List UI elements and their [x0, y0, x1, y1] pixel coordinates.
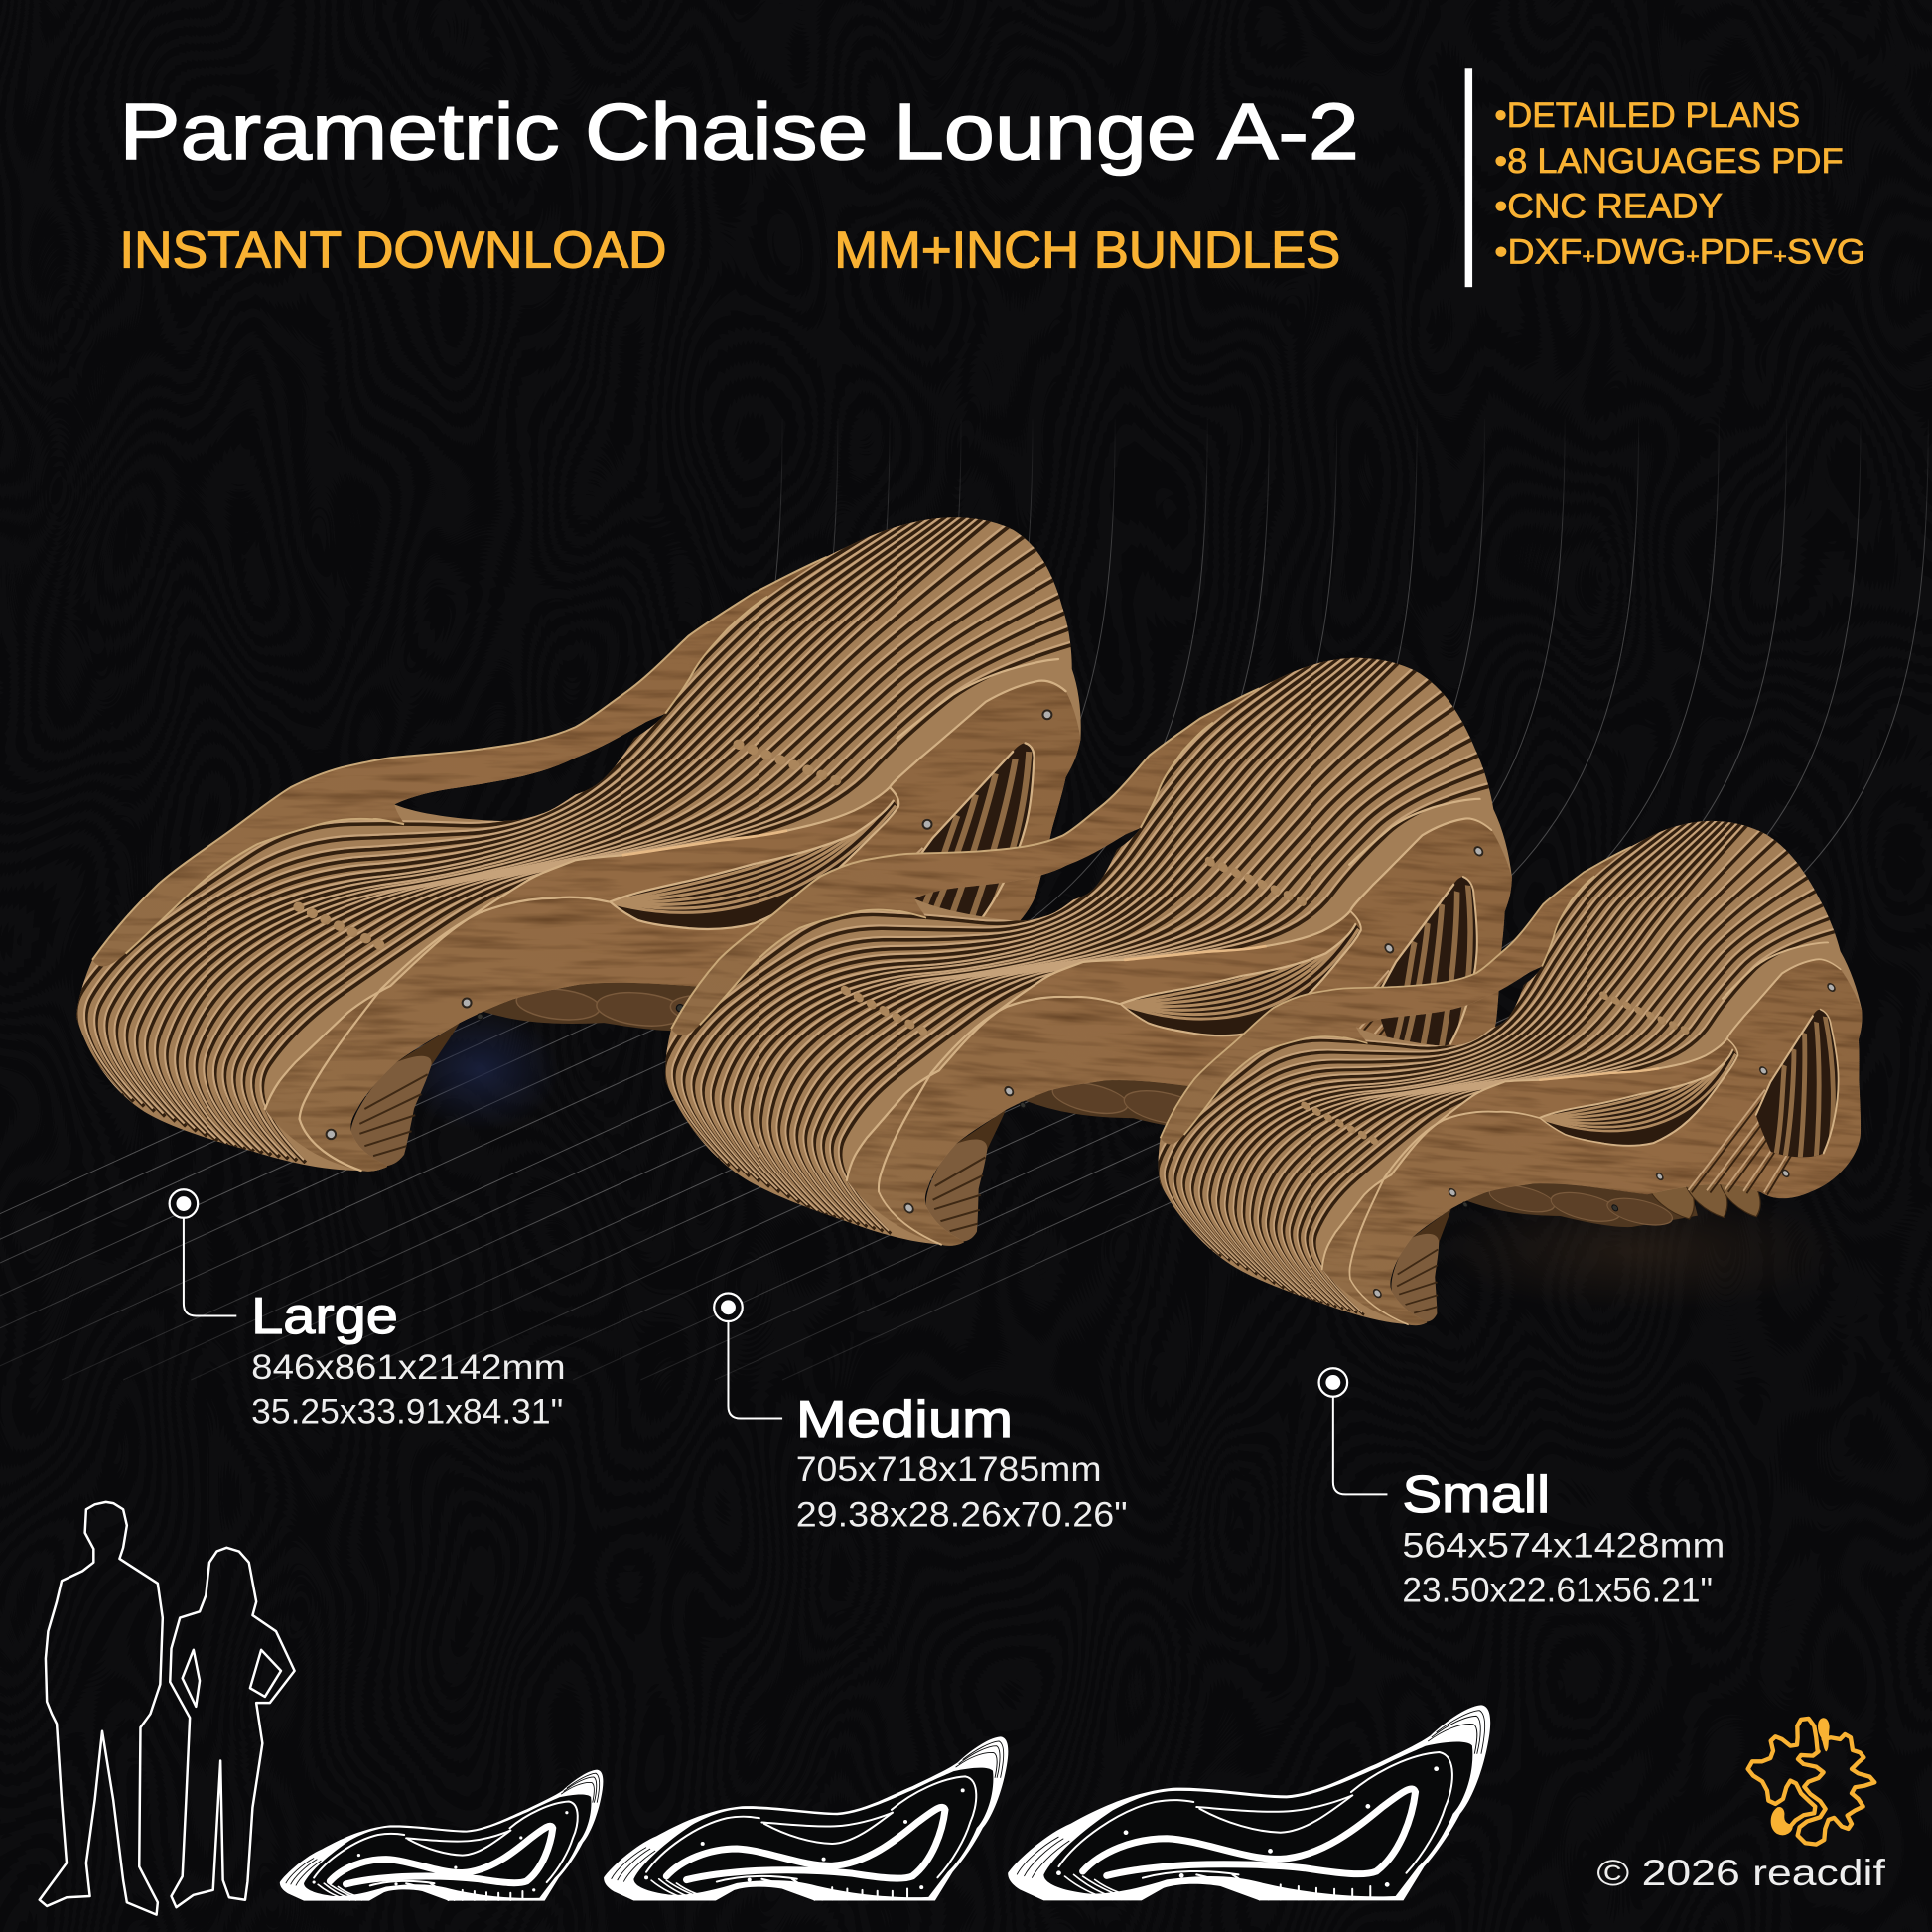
label: small size: [1319, 1368, 1725, 1609]
label: large size: 35.25x33.91x84.31": [251, 1393, 563, 1431]
floor reflection: [1430, 1189, 1849, 1312]
label: small size: 564x574x1428mm: [1402, 1528, 1725, 1566]
label: large size: [170, 1189, 566, 1431]
floor glow: [400, 1008, 561, 1131]
feature list: •DETAILED PLANS: [1494, 97, 1800, 135]
plan: medium profile: [604, 1736, 1008, 1901]
title: Parametric Chaise Lounge A-2: [119, 87, 1359, 176]
copyright: © 2026 reacdif: [1596, 1852, 1886, 1893]
chair: medium: [584, 581, 1595, 1289]
divider bar: [1465, 68, 1472, 287]
label: large size: Large: [251, 1288, 398, 1345]
plan: large profile: [1008, 1705, 1490, 1900]
subtitle: instant download: INSTANT DOWNLOAD: [119, 221, 666, 279]
label: medium size: [714, 1294, 1128, 1535]
label: medium size: 29.38x28.26x70.26": [796, 1497, 1128, 1535]
icon: logo: [1748, 1719, 1874, 1845]
label: medium size: Medium: [796, 1391, 1013, 1449]
chair: large: [74, 490, 1100, 1172]
label: medium size: 705x718x1785mm: [796, 1451, 1102, 1489]
plan: small profile: [280, 1770, 603, 1901]
floor and wall lines: [0, 419, 1928, 1380]
icon: woman silhouette: [170, 1548, 295, 1907]
subtitle: bundles: MM+INCH BUNDLES: [834, 221, 1340, 279]
feature list: •8 LANGUAGES PDF: [1494, 143, 1844, 181]
label: small size: Small: [1402, 1466, 1550, 1524]
chair: small: [1047, 753, 1932, 1364]
feature list: [1494, 97, 1865, 272]
label: small size: 23.50x22.61x56.21": [1402, 1572, 1713, 1609]
feature list: •DXF +DWG +PDF +SVG: [1494, 234, 1865, 272]
icon: man silhouette: [40, 1502, 163, 1915]
feature list: •CNC READY: [1494, 189, 1723, 226]
label: large size: 846x861x2142mm: [251, 1349, 566, 1387]
